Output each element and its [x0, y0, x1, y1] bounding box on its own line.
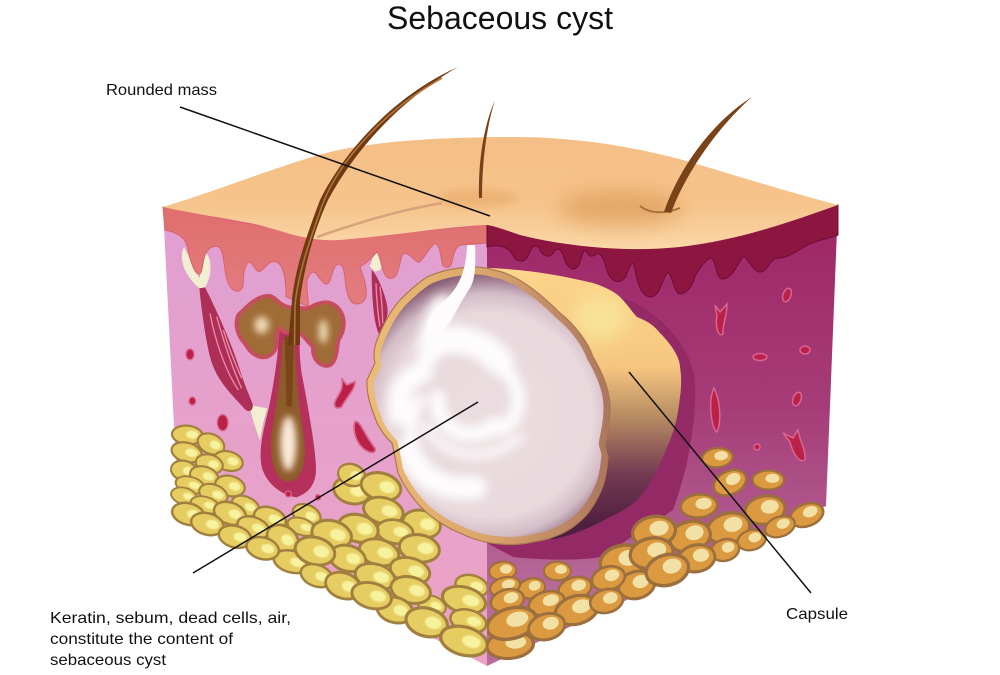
label: contents: constitute the content of [50, 631, 234, 648]
epidermis: right face [487, 205, 838, 297]
cyst capsule body [480, 268, 681, 540]
keratin swirl [399, 305, 520, 488]
cyst capsule ring [367, 267, 610, 545]
skin block: left face [163, 207, 487, 666]
skin surface [163, 137, 838, 249]
yellow fat cells: left face [169, 424, 491, 661]
shadow behind cyst capsule [487, 297, 695, 560]
muscle: small arrector pili [369, 250, 388, 335]
hair follicle [261, 328, 316, 497]
pointer line: contents [193, 402, 478, 573]
epidermis: left face [163, 207, 487, 307]
skin block: right face [487, 205, 838, 666]
orange fat cells: right face [483, 447, 827, 660]
blood vessels: right face [711, 287, 810, 461]
follicle and gland [186, 296, 375, 500]
title: Sebaceous cyst [387, 0, 613, 36]
label: rounded mass: Rounded mass [106, 82, 217, 99]
pointer line: rounded mass [180, 107, 490, 216]
cyst contents [374, 274, 604, 537]
hair: middle [479, 100, 495, 198]
blood vessels: left face [186, 349, 375, 500]
label: contents: sebaceous cyst [50, 652, 167, 669]
hair: right [664, 97, 752, 213]
sebaceous gland [237, 296, 344, 366]
label: capsule: Capsule [786, 606, 848, 623]
muscle: large arrector pili [182, 247, 267, 441]
surface shading [558, 190, 682, 226]
label: contents: Keratin, sebum, dead cells, air, [50, 610, 291, 627]
hair: main shaft [288, 67, 458, 345]
sebum duct [426, 245, 475, 345]
pointer line: capsule [629, 372, 811, 593]
